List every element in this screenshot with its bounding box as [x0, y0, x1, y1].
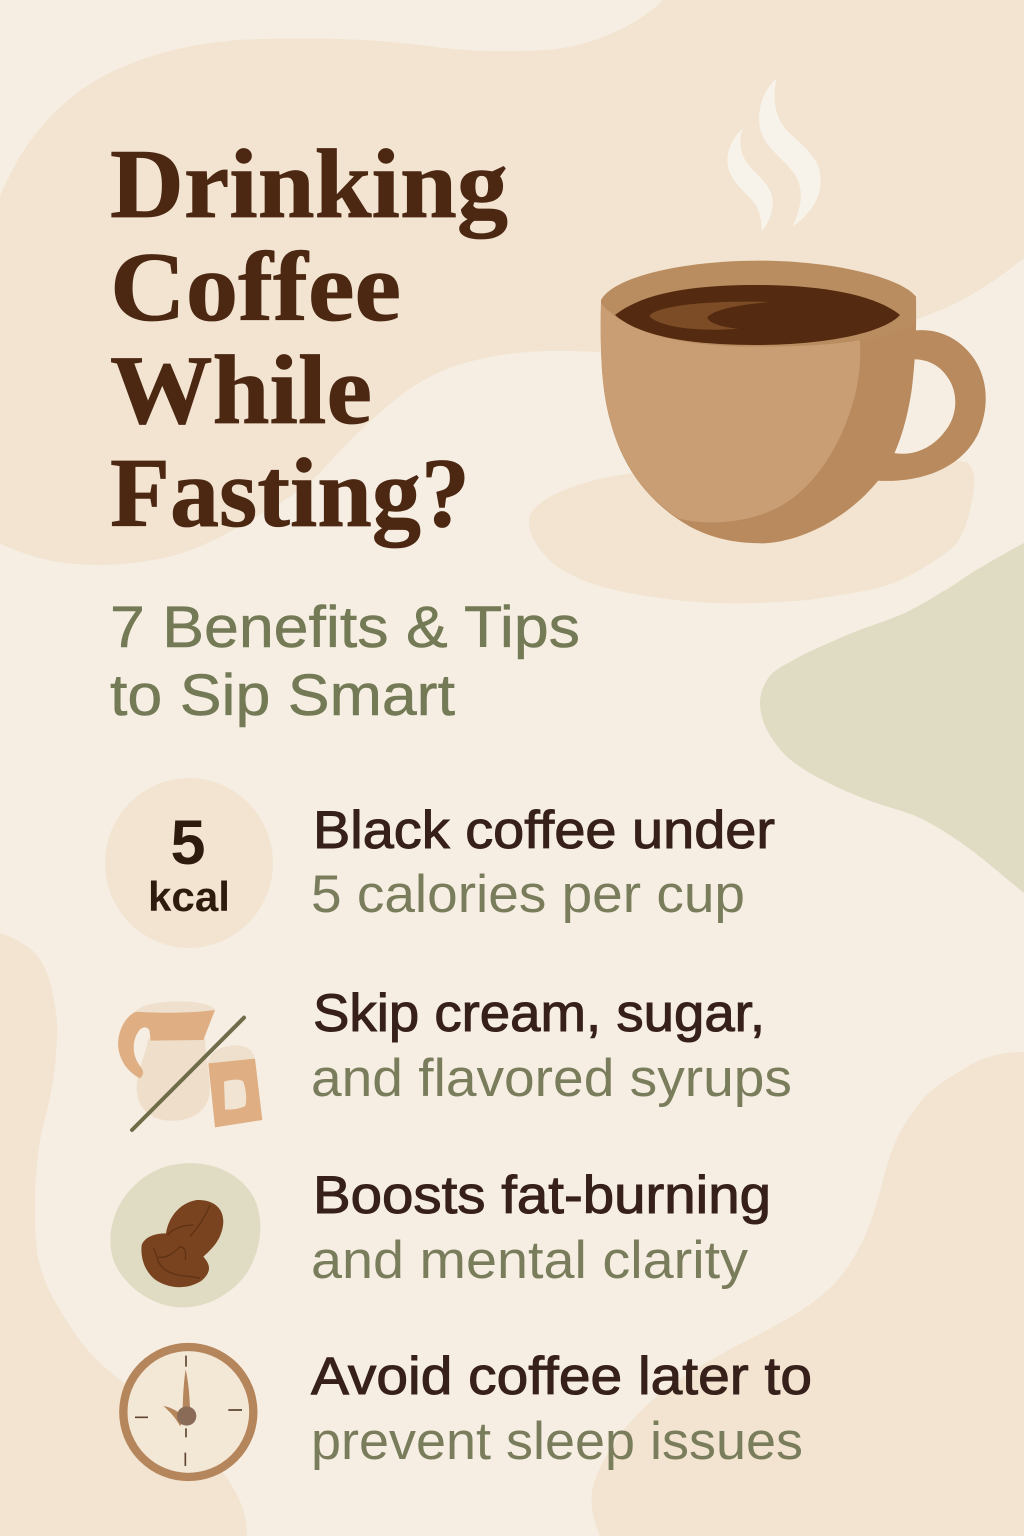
background blob: bottom right: [592, 1052, 1024, 1536]
icon: coffee bean: [110, 1163, 260, 1307]
cup rim: [601, 261, 916, 347]
text: and flavored syrups: [311, 1049, 792, 1108]
text: Avoid coffee later to: [311, 1347, 812, 1406]
item: fat-burning: [110, 1163, 771, 1307]
subtitle: to Sip Smart: [110, 663, 455, 728]
text: and mental clarity: [311, 1231, 749, 1290]
title: Coffee: [110, 233, 401, 342]
item: skip cream: [118, 984, 792, 1130]
coffee surface: [615, 285, 900, 345]
steam: [727, 78, 821, 232]
item: 5 kcal: [105, 778, 775, 948]
background blob: top: [0, 0, 1024, 565]
text: Black coffee under: [313, 801, 775, 860]
subtitle: 7 Benefits & Tips: [110, 595, 580, 660]
text: [311, 1166, 771, 1290]
kcal badge: kcal: [148, 873, 230, 920]
icon: coffee cup with steam: [601, 78, 986, 543]
background blob: green: [760, 543, 1024, 893]
cup body: [601, 287, 916, 543]
title: Drinking: [110, 130, 508, 239]
text: [311, 801, 775, 924]
title: [110, 130, 508, 548]
text: Skip cream, sugar,: [313, 984, 765, 1043]
subtitle: [110, 595, 580, 728]
item: avoid late coffee: [123, 1347, 812, 1477]
text: 5 calories per cup: [311, 865, 745, 924]
icon: clock: [123, 1347, 253, 1477]
text: Boosts fat-burning: [313, 1166, 771, 1225]
title: While: [110, 336, 372, 445]
text: [311, 984, 792, 1108]
cup handle: [877, 330, 986, 481]
background blob: cup saucer: [529, 459, 974, 603]
background blob: bottom left: [0, 933, 247, 1536]
cup front highlight: [601, 303, 860, 522]
kcal badge: [105, 778, 273, 948]
title: Fasting?: [110, 439, 470, 548]
icon: crossed-out pitcher and sugar: [118, 1001, 262, 1130]
text: prevent sleep issues: [311, 1412, 803, 1471]
text: [311, 1347, 812, 1471]
coffee swirl: [649, 302, 770, 330]
kcal badge: 5: [170, 808, 206, 878]
